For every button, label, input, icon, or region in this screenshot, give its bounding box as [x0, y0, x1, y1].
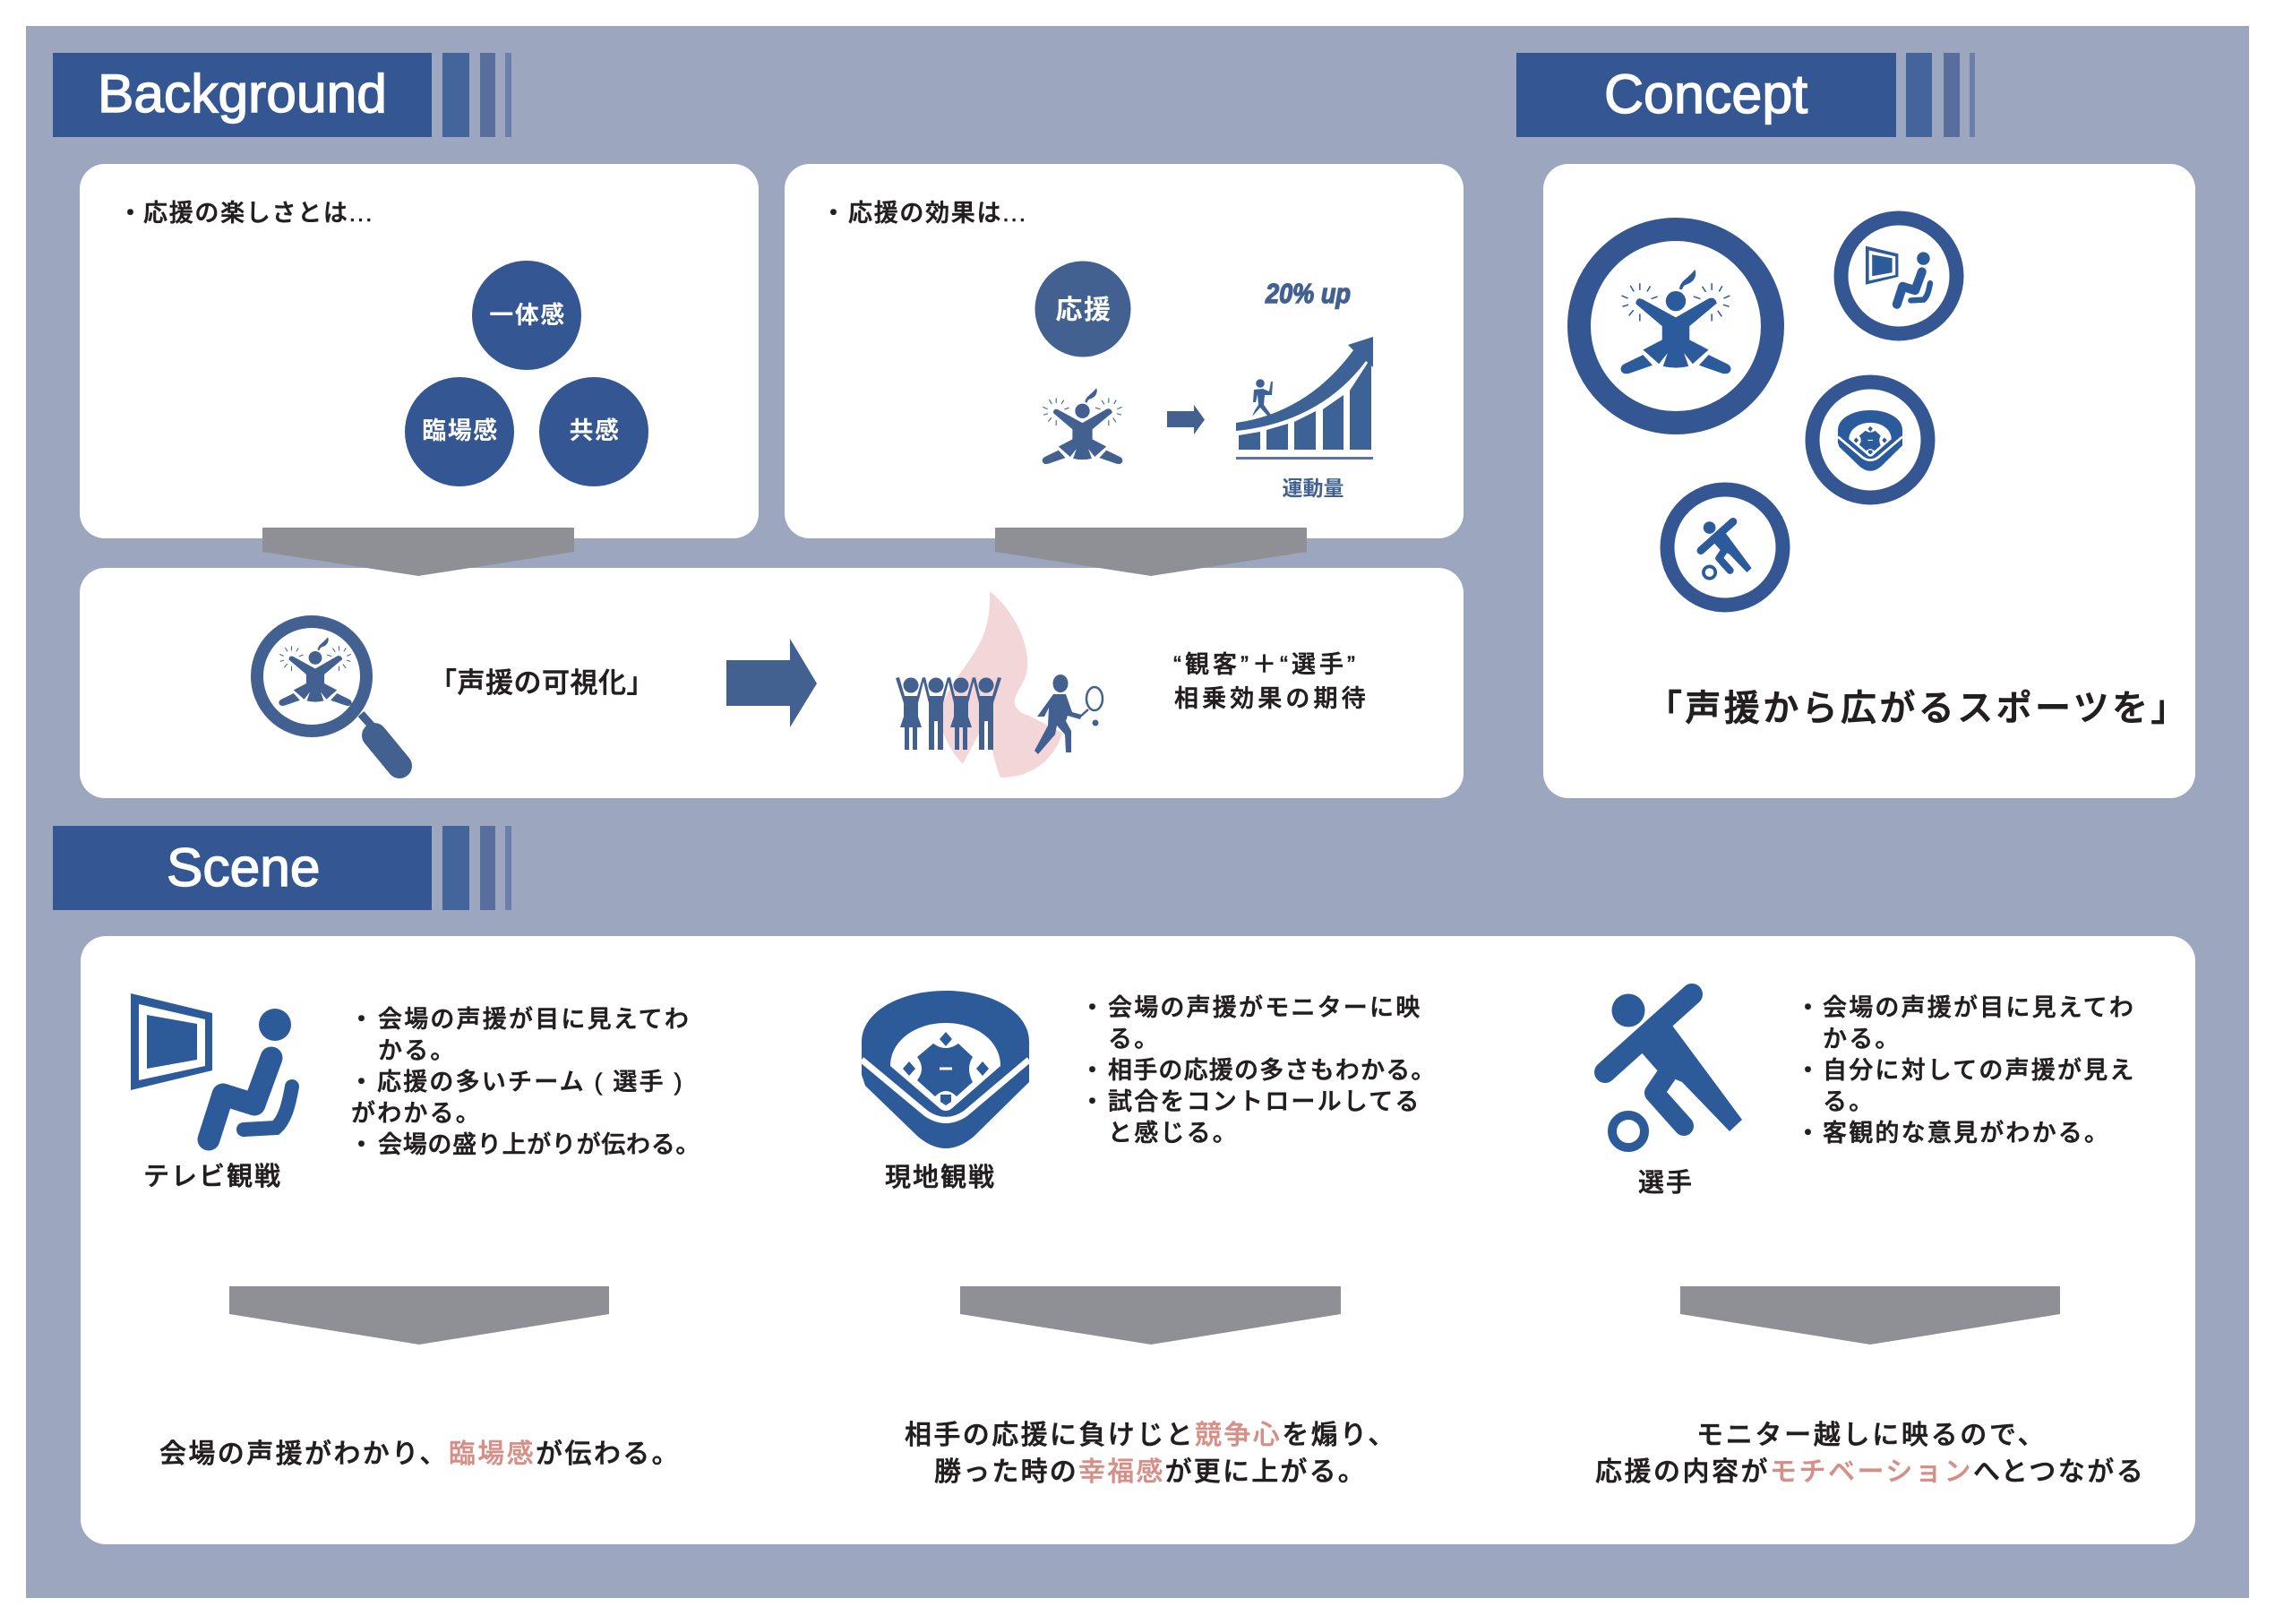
text: player bullets: る。 [1823, 1088, 1875, 1115]
text: effect heading: 応援の効果は... [848, 200, 1027, 227]
panel: effect of cheering [785, 164, 1464, 538]
text: effect heading: ・ [821, 200, 847, 227]
panel: concept [1543, 164, 2195, 798]
text: TV viewing bullets: 会場の盛り上がりが伝わる。 [378, 1131, 700, 1158]
text: stadium viewing bullets: と感じる。 [1108, 1120, 1239, 1147]
icon: tennis player [1034, 675, 1103, 754]
panel: enjoyment of cheering [80, 164, 759, 538]
text: result TV viewing: 会場の声援がわかり、臨場感が伝わる。 [159, 1439, 681, 1469]
text: player bullets: 客観的な意見がわかる。 [1823, 1120, 2110, 1147]
icon: player ring [1668, 489, 1782, 606]
arrow: scene funnel 3 [1680, 1286, 2060, 1345]
circle: unity [472, 261, 581, 370]
icon: flame [940, 591, 1062, 778]
arrow: funnel left [262, 528, 574, 576]
circle: cheering [1035, 262, 1130, 357]
text: player bullets: ・ [1796, 1057, 1822, 1084]
text: player bullets: 自分に対しての声援が見え [1823, 1057, 2136, 1084]
text: result stadium viewing [905, 1421, 1397, 1487]
circle: presence [405, 377, 514, 486]
text: stadium viewing bullets: 試合をコントロールしてる [1108, 1088, 1421, 1115]
arrow: large [726, 639, 817, 727]
text: stadium viewing label: 現地観戦 [885, 1163, 996, 1192]
text: concept slogan: 「声援から広がるスポーツを」 [1646, 689, 2190, 728]
icon: stadium [862, 991, 1029, 1148]
circle: empathy: 共感 [570, 417, 620, 444]
text: player label: 選手 [1638, 1168, 1694, 1198]
icon: TV viewer [131, 993, 292, 1139]
text: stadium viewing bullets [1080, 994, 1437, 1147]
text: player bullets: ・ [1796, 1120, 1822, 1147]
icon: cheerleader [1043, 388, 1122, 464]
text: stadium viewing bullets: 会場の声援がモニターに映 [1108, 994, 1421, 1021]
text: enjoyment heading: 応援の楽しさとは... [143, 200, 373, 227]
heading: Concept: Concept [1604, 64, 1807, 125]
text: exercise amount: 運動量 [1283, 477, 1344, 500]
text: 20% up: 20% up [1265, 278, 1351, 309]
text: player bullets: かる。 [1823, 1026, 1902, 1053]
text: synergy expectation: “観客”＋“選手” [1173, 651, 1359, 678]
arrow: funnel right [995, 528, 1307, 576]
icon: runner [1252, 379, 1273, 417]
heading: Concept [1516, 53, 1975, 137]
text: stadium viewing bullets: 相手の応援の多さもわかる。 [1108, 1057, 1437, 1084]
text: TV viewing bullets: 会場の声援が目に見えてわ [378, 1006, 691, 1033]
text: enjoyment heading: ・ [118, 200, 144, 227]
heading: Background [53, 53, 511, 137]
text: TV viewing bullets: ・ [349, 1006, 375, 1033]
icon: cheerleader ring [1579, 229, 1773, 423]
text: TV viewing bullets [349, 1006, 700, 1158]
chart: activity up 20% [1236, 278, 1373, 500]
text: result stadium viewing: 相手の応援に負けじと競争心を煽り、 [905, 1421, 1397, 1450]
circle: cheering: 応援 [1055, 296, 1112, 325]
text: TV viewing bullets: がわかる。 [351, 1100, 482, 1127]
heading: Background: Background [98, 63, 387, 124]
text: TV viewing bullets: ・ [349, 1131, 374, 1158]
heading: Scene: Scene [167, 837, 321, 898]
circle: empathy [539, 377, 648, 486]
arrow: scene funnel 1 [229, 1286, 609, 1345]
scene: player [1605, 994, 2136, 1198]
text: synergy expectation [1173, 651, 1369, 712]
panel: visualisation result [80, 568, 1464, 798]
text: stadium viewing bullets: ・ [1080, 994, 1106, 1021]
text: TV viewing bullets: ・ [349, 1069, 375, 1096]
circle: unity: 一体感 [489, 302, 566, 329]
text: result player: 応援の内容がモチベーションへとつながる [1595, 1457, 2145, 1487]
arrow: scene funnel 2 [960, 1286, 1341, 1345]
text: synergy expectation: 相乗効果の期待 [1174, 685, 1369, 712]
heading: Scene [53, 826, 511, 910]
text: stadium viewing bullets: ・ [1080, 1088, 1106, 1115]
scene: TV viewing [131, 993, 700, 1191]
text: TV viewing bullets: かる。 [378, 1037, 457, 1064]
arrow: small [1167, 405, 1205, 434]
text: visualisation of cheering: 「声援の可視化」 [429, 667, 655, 699]
text: result player [1595, 1421, 2145, 1487]
text: player bullets: ・ [1796, 994, 1822, 1021]
icon: magnifier with cheerleader [257, 622, 399, 766]
text: stadium viewing bullets: ・ [1080, 1057, 1105, 1084]
text: result stadium viewing: 勝った時の幸福感が更に上がる。 [934, 1457, 1367, 1487]
panel: scenes [81, 936, 2195, 1544]
icon: crowd [896, 677, 1001, 750]
icon: soccer player [1605, 994, 1742, 1147]
scene: stadium viewing [862, 991, 1437, 1192]
icon: viewer ring [1841, 219, 1956, 333]
circle: presence: 臨場感 [422, 417, 499, 444]
text: TV viewing label: テレビ観戦 [143, 1162, 282, 1191]
icon: stadium ring [1813, 382, 1927, 498]
text: TV viewing bullets: 応援の多いチーム ( 選手 ) [377, 1069, 684, 1096]
text: stadium viewing bullets: る。 [1108, 1026, 1160, 1053]
text: player bullets [1796, 994, 2136, 1147]
text: result player: モニター越しに映るので、 [1696, 1421, 2047, 1450]
text: player bullets: 会場の声援が目に見えてわ [1823, 994, 2135, 1021]
